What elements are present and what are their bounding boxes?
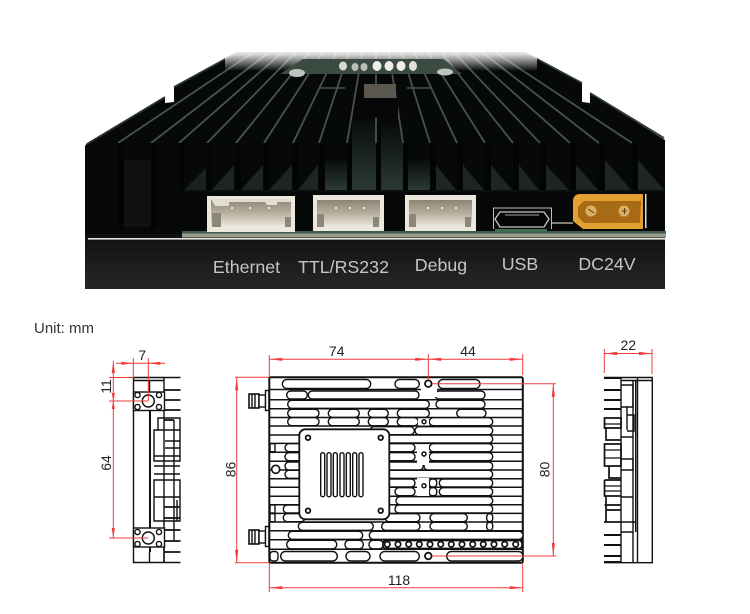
left view outline xyxy=(134,378,180,562)
mounting hole bottom xyxy=(134,528,164,547)
drawing: top view with fins xyxy=(222,343,556,592)
port labels: USB xyxy=(502,254,538,274)
left view dimensions: 7 xyxy=(138,347,146,363)
central square module with slots xyxy=(299,429,389,519)
port labels: Ethernet xyxy=(213,257,280,277)
unit label: Unit: mm xyxy=(34,320,94,337)
connector: Ethernet xyxy=(207,196,295,232)
top view dimensions xyxy=(222,343,556,592)
left view dimensions: 11 xyxy=(98,379,114,394)
left view dimensions: 64 xyxy=(98,455,114,471)
right view dimension xyxy=(604,337,652,374)
right view dimension: 22 xyxy=(621,337,636,353)
right view outline xyxy=(604,378,652,563)
top view dimensions: 86 xyxy=(222,462,238,477)
green top plate with holes xyxy=(280,59,462,118)
port labels: Debug xyxy=(415,255,467,275)
port labels xyxy=(213,254,636,277)
row of vent holes xyxy=(383,540,522,548)
top view dimensions: 80 xyxy=(536,462,552,477)
connector: Debug xyxy=(405,195,476,231)
aluminium base strip xyxy=(85,231,666,289)
port labels: TTL/RS232 xyxy=(298,257,389,277)
left view dimensions xyxy=(98,347,165,538)
photo: module front view xyxy=(85,47,666,289)
connector: DC24V power xyxy=(573,194,646,229)
drawing: right side view xyxy=(604,337,652,563)
top view dimensions: 74 xyxy=(329,343,345,359)
SMA connectors xyxy=(249,390,269,546)
connector: TTL/RS232 xyxy=(313,195,384,231)
top view dimensions: 44 xyxy=(460,343,476,359)
connector: USB xyxy=(494,208,573,232)
fin slots xyxy=(270,380,523,561)
mounting hole top xyxy=(134,392,164,410)
body outline and fin lines xyxy=(269,377,523,563)
mounting holes on fins xyxy=(272,379,437,562)
port labels: DC24V xyxy=(578,254,636,274)
top view dimensions: 118 xyxy=(388,572,410,588)
heat sink body xyxy=(85,47,665,234)
drawing: left side view xyxy=(98,347,180,562)
